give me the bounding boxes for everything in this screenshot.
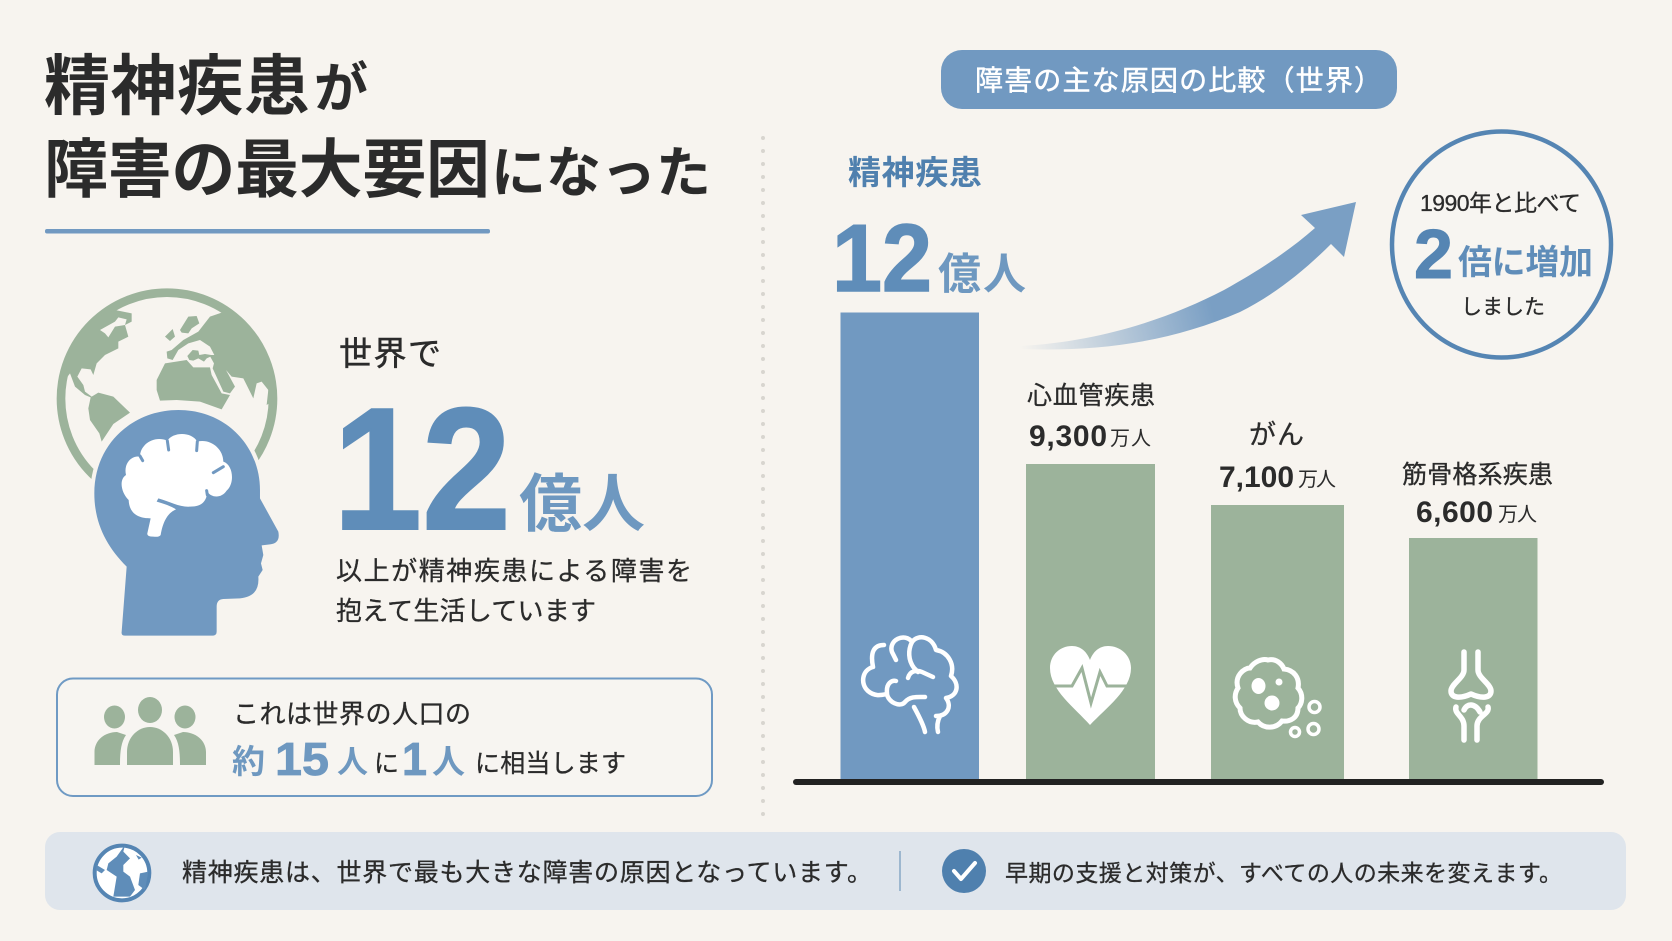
axis [793,779,1604,785]
bar label: 筋骨格系疾患: 6,600 [1416,496,1493,529]
bar label: がん [1219,420,1336,494]
stat: 12億人: 世界で [339,335,441,372]
bar chart [793,312,1604,785]
stat: 12億人 [333,335,692,626]
stat: 12億人: 以上が精神疾患による障害を [336,556,692,586]
icon: globe small [95,845,149,900]
banner: bottom message [45,832,1626,910]
bar: がん [1211,505,1344,780]
heading pill [941,50,1397,109]
bar: 筋骨格系疾患 [1409,538,1538,780]
icon: brain [122,434,232,537]
bar label: がん: 7,100 [1219,461,1294,494]
callout: 1 in 15 people: 1 [402,733,427,785]
bar label: 心血管疾患 [1027,382,1155,453]
label: 精神疾患 12億人: 12 [832,205,932,312]
heading pill: 障害の主な原因の比較（世界） [975,65,1382,96]
title: 障害の最大要因 [44,134,490,206]
callout: 1 in 15 people: 15 [275,733,329,785]
stat: 12億人: 億人 [519,470,645,540]
icon: cell [1235,659,1320,736]
arrow [1020,202,1356,350]
label: 精神疾患 12億人: 精神疾患 [848,154,982,191]
stat: 12億人: 12 [333,371,511,566]
bar label: 心血管疾患: 9,300 [1029,420,1107,453]
callout: 1 in 15 people: に [374,750,399,778]
title: 精神疾患 [44,49,310,123]
bar label: 心血管疾患: 万人 [1110,428,1151,450]
bar: 心血管疾患 [1026,464,1155,780]
callout: 2x increase: 1990年と比べて [1420,190,1581,216]
bar label: がん: がん [1249,420,1304,450]
banner: bottom message: 早期の支援と対策が、すべての人の未来を変えます。 [1005,860,1562,886]
bar label: 心血管疾患: 心血管疾患 [1027,382,1155,410]
bar label: 筋骨格系疾患: 筋骨格系疾患 [1402,461,1553,489]
callout: 2x increase: 倍に増加 [1458,244,1593,282]
title [44,49,711,206]
callout: 1 in 15 people: 人 [432,743,465,780]
title: になった [491,142,711,204]
label: 精神疾患 12億人: 億人 [938,251,1026,299]
icon: heart [1050,646,1132,725]
callout: 1 in 15 people [57,678,712,796]
icon: globe [61,293,277,505]
callout: 2x increase: しました [1461,296,1545,319]
bar label: 筋骨格系疾患: 万人 [1498,504,1537,526]
callout: 1 in 15 people: これは世界の人口の [233,699,471,729]
title: が [314,59,368,119]
bar: 精神疾患 [840,312,979,780]
stat: 12億人: 抱えて生活しています [336,596,596,626]
icon: head [94,410,279,636]
callout: 1 in 15 people: 人 [337,745,368,780]
icon: globe and head with brain [61,293,279,636]
callout: 2x increase: 2 [1414,215,1453,293]
icon: joint [1451,652,1491,740]
callout: 1 in 15 people: 約 [232,743,265,780]
callout: 1 in 15 people: に相当します [475,750,626,778]
callout: 2x increase [1392,132,1611,358]
label: 精神疾患 12億人 [832,154,1026,312]
icon: people [94,697,206,765]
banner: bottom message: 精神疾患は、世界で最も大きな障害の原因となっています。 [182,859,872,887]
icon: brain outline [863,637,957,732]
bar label: 筋骨格系疾患 [1402,461,1553,529]
icon: check [942,849,986,893]
bar label: がん: 万人 [1298,469,1336,491]
